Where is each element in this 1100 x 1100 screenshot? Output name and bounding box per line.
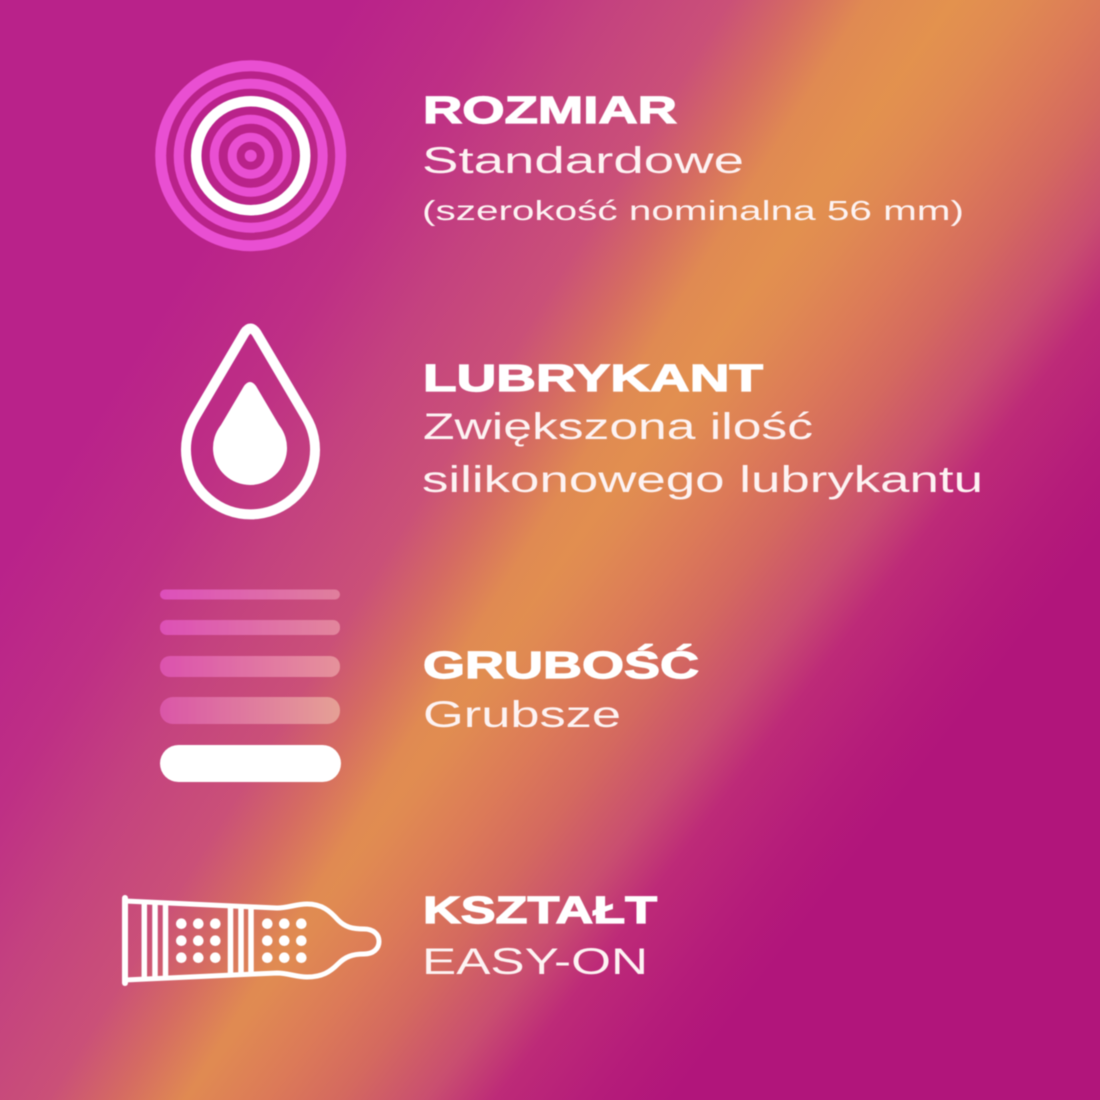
heading: lubrykant: LUBRYKANT (423, 358, 763, 400)
text: nominal width: (szerokość nominalna 56 mm) (422, 195, 964, 226)
text: silicone lubricant: silikonowego lubrykantu (422, 459, 983, 500)
icon: easy-on shape (124, 898, 379, 983)
text: increased amount: Zwiększona ilość (423, 406, 813, 447)
heading: kształt: KSZTAŁT (423, 890, 657, 932)
text: easy-on: EASY-ON (422, 941, 648, 982)
icon: thickness bars (160, 590, 341, 782)
heading: rozmiar: ROZMIAR (423, 90, 677, 132)
panel: lubrykant (186, 328, 983, 514)
icon: drop (186, 328, 315, 514)
panel: kształt (124, 890, 657, 983)
text: standardowe: Standardowe (422, 140, 744, 181)
panel: grubość (160, 590, 699, 782)
heading: grubość: GRUBOŚĆ (423, 643, 699, 687)
panel: rozmiar (161, 66, 964, 246)
icon: concentric rings (161, 66, 341, 246)
text: grubsze: Grubsze (423, 694, 621, 735)
